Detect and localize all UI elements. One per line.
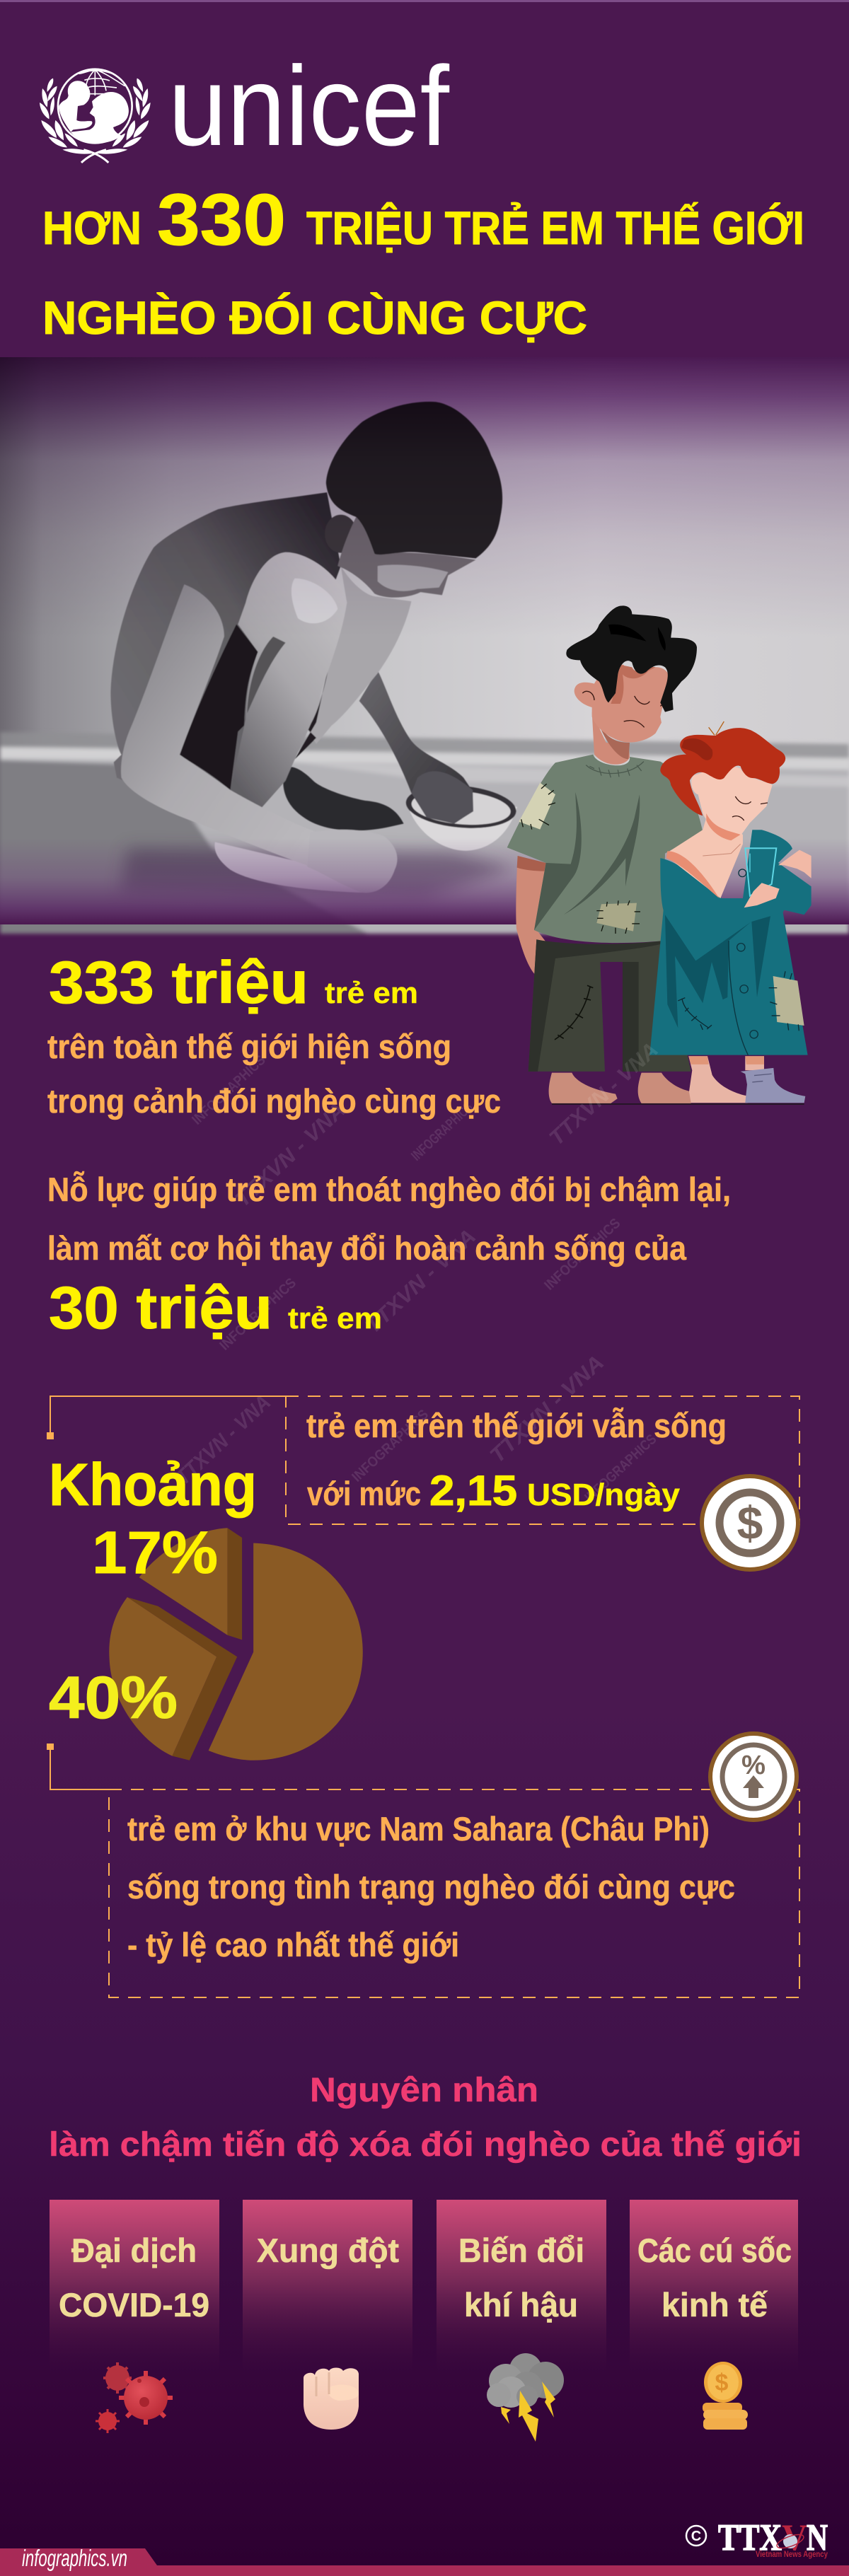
boy fist: [307, 830, 398, 893]
boy: [110, 402, 518, 893]
logo: TTXVN: Vietnam News Agency: [756, 2549, 828, 2559]
icon: dollar coin: $: [737, 1497, 763, 1549]
purple bottom wash: [0, 838, 849, 924]
label: 17%: 17%: [92, 1519, 218, 1586]
boy far arm: [359, 671, 475, 818]
icon: raised fist: [304, 2368, 359, 2430]
slice: remaining share: [209, 1543, 363, 1760]
slice: 17%: [139, 1528, 242, 1640]
text block: 30 million: trẻ em: [288, 1301, 382, 1335]
icon: coin stack: [703, 2362, 748, 2430]
panel: economic shocks: [630, 2200, 798, 2430]
callout box: 2.15 USD per day: [286, 1396, 799, 1524]
title: NGHÈO ĐÓI CÙNG CỰC: [42, 291, 587, 344]
logo: TTXVN: C: [691, 2529, 701, 2544]
boy shin: [307, 566, 411, 744]
icon: unicef emblem: [40, 69, 151, 163]
panel: economic shocks: Các cú sốc: [637, 2232, 792, 2269]
girl hands: [778, 850, 812, 878]
boy face: [574, 665, 669, 743]
panel: COVID-19: COVID-19: [59, 2286, 209, 2323]
girl phone: [745, 848, 776, 896]
girl legs: [688, 1056, 749, 1103]
logo: TTXVN: [686, 2517, 828, 2559]
text block: 30 million: Nỗ lực giúp trẻ em thoát nghèo đói bị chậm lại,: [47, 1171, 731, 1208]
boy back and torso: [110, 492, 341, 811]
watermarks: INFOGRAPHICS: [349, 1407, 432, 1485]
heading: causes: [49, 2072, 802, 2164]
watermarks: TTXVN - VNA: [485, 1351, 608, 1468]
watermarks: TTXVN - VNA: [361, 1225, 480, 1338]
logo: TTXVN: TTX: [718, 2517, 782, 2558]
floor: [0, 732, 849, 934]
panel: conflict: [243, 2200, 412, 2430]
boy neck: [592, 712, 630, 765]
watermarks: [171, 1038, 663, 1506]
boy face: [337, 517, 475, 598]
panel: climate change: Biến đổi: [458, 2232, 584, 2269]
text block: 30 million: làm mất cơ hội thay đổi hoàn cảnh sống của: [47, 1229, 687, 1267]
watermarks: TTXVN - VNA: [545, 1038, 663, 1150]
title: [42, 179, 804, 344]
text block: 333 million: trên toàn thế giới hiện sống: [47, 1028, 451, 1065]
boy hand in bowl: [411, 771, 473, 824]
text block: 30 million: [47, 1171, 731, 1341]
heading: Khoảng: Khoảng: [49, 1451, 257, 1518]
callout box: Sub-Saharan Africa: - tỷ lệ cao nhất thế giới: [127, 1926, 459, 1963]
girl sock: [741, 1068, 805, 1103]
watermarks: INFOGRAPHICS: [582, 1432, 659, 1506]
watermarks: INFOGRAPHICS: [216, 1275, 299, 1354]
bowl: [410, 807, 517, 851]
source: infographics.vn: infographics.vn: [22, 2545, 127, 2571]
callout box: Sub-Saharan Africa: trẻ em ở khu vực Nam Sahara (Châu Phi): [127, 1810, 710, 1847]
watermarks: INFOGRAPHICS: [189, 1052, 269, 1128]
girl dress upper: [660, 830, 812, 961]
watermarks: INFOGRAPHICS: [408, 1100, 476, 1164]
connector: top callout: [47, 1396, 286, 1439]
boy hair: [326, 402, 502, 558]
icon: storm cloud: [487, 2353, 564, 2442]
panel: conflict: Xung đột: [257, 2232, 399, 2269]
unicef logo: [40, 42, 450, 169]
purple top wash: [0, 357, 849, 637]
boy thigh and knee: [231, 552, 347, 808]
boy shorts: [180, 625, 258, 790]
boy sleeve shadow: [517, 856, 546, 871]
heading: causes: Nguyên nhân: [310, 2072, 538, 2109]
slice: 40%: [109, 1597, 237, 1760]
watermarks: TTXVN - VNA: [171, 1391, 275, 1490]
boy back foot: [214, 842, 362, 893]
boy near arm: [121, 584, 319, 866]
wordmark: unicef: unicef: [168, 42, 450, 169]
callout box: Sub-Saharan Africa: [109, 1789, 799, 1997]
watermarks: INFOGRAPHICS: [541, 1215, 623, 1294]
callout box: Sub-Saharan Africa: sống trong tình trạng nghèo đói cùng cực: [127, 1868, 735, 1905]
girl hair: [660, 728, 785, 816]
boy ear: [325, 515, 357, 553]
girl face: [691, 766, 773, 836]
panel: COVID-19: [50, 2200, 219, 2433]
girl dress patch: [773, 976, 804, 1026]
girl chest: [667, 813, 743, 898]
text block: 333 million: trẻ em: [325, 976, 418, 1009]
callout box: 2.15 USD per day: với mức: [307, 1475, 421, 1512]
text block: 333 million: trong cảnh đói nghèo cùng cực: [47, 1082, 501, 1120]
boy dark foot: [283, 767, 404, 830]
watermarks: TTXVN - VNA: [231, 1098, 350, 1212]
hero photo: child eating from a bowl: [0, 357, 849, 934]
callout box: 2.15 USD per day: USD/ngày: [527, 1478, 681, 1512]
icon: percent up: [708, 1731, 799, 1822]
icon: percent up: %: [741, 1751, 766, 1780]
label: 40%: 40%: [49, 1664, 178, 1731]
boy arm: [516, 856, 547, 976]
boy feet: [549, 1073, 618, 1103]
title: HƠN: [42, 202, 142, 254]
panel: COVID-19: Đại dịch: [71, 2232, 197, 2269]
logo: TTXVN: V: [782, 2517, 807, 2558]
heading: causes: làm chậm tiến độ xóa đói nghèo của thế giới: [49, 2126, 802, 2164]
panel: climate change: [437, 2200, 606, 2442]
text block: 333 million: [47, 949, 501, 1120]
pie chart: [109, 1528, 363, 1760]
icon: dollar coin: [700, 1474, 800, 1572]
boy hair: [566, 605, 697, 712]
boy shirt: [507, 755, 703, 943]
callout box: 2.15 USD per day: trẻ em trên thế giới vẫn sống: [306, 1407, 727, 1444]
title: TRIỆU TRẺ EM THẾ GIỚI: [306, 202, 804, 254]
logo: TTXVN: N: [807, 2517, 828, 2558]
text block: 333 million: 333 triệu: [49, 949, 308, 1016]
girl dress lower: [649, 905, 808, 1055]
panel: climate change: khí hậu: [464, 2286, 578, 2323]
icon: coin stack: $: [715, 2369, 729, 2396]
floor line: [552, 1103, 804, 1106]
connector: bottom callout: [47, 1744, 109, 1789]
text block: 30 million: 30 triệu: [49, 1275, 272, 1341]
title: 330: [157, 179, 286, 260]
panel: economic shocks: kinh tế: [662, 2286, 768, 2323]
icon: virus: [96, 2362, 173, 2433]
footer band: [0, 2545, 849, 2576]
callout box: 2.15 USD per day: 2,15: [429, 1467, 517, 1514]
illustration: two poor children: [507, 605, 812, 1104]
floor shadow: [120, 849, 516, 898]
boy trousers: [529, 939, 691, 1072]
shirt patches: [519, 783, 555, 830]
